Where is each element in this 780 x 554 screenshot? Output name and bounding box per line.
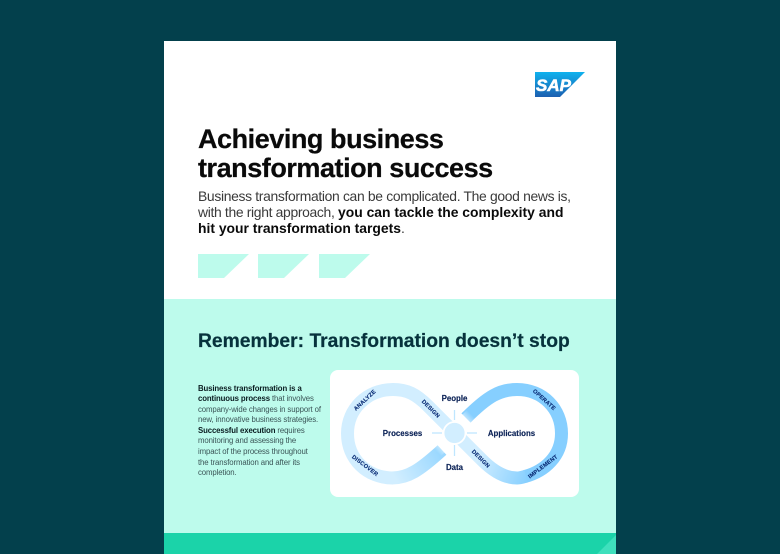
body text: monitoring and assessing the <box>198 436 296 445</box>
title: Achieving business <box>198 124 443 154</box>
panel: document page <box>164 41 616 554</box>
section heading: Remember: Transformation doesn’t stop <box>198 331 570 352</box>
diagram labels: Processes <box>383 429 423 438</box>
panel: infinity diagram card <box>330 370 579 497</box>
intro text: hit your transformation targets. <box>198 220 405 236</box>
body text <box>198 384 322 477</box>
body text: the transformation and after its <box>198 458 300 467</box>
logo: SAP: SAP <box>536 76 572 95</box>
panel: remember section <box>164 299 616 533</box>
body text: company-wide changes in support of <box>198 405 321 414</box>
loop stage labels: IMPLEMENT <box>527 454 560 480</box>
title: transformation success <box>198 153 493 183</box>
loop stage labels <box>350 388 560 480</box>
diagram labels: Data <box>446 463 464 472</box>
loop stage labels: DISCOVER <box>350 454 379 478</box>
footer band <box>164 533 616 554</box>
body text: new, innovative business strategies. <box>198 415 318 424</box>
intro text <box>198 188 571 236</box>
diagram labels: People <box>442 394 468 403</box>
center hub and spokes <box>432 410 477 456</box>
body text: completion. <box>198 468 237 477</box>
intro text: with the right approach, you can tackle the complexity and <box>198 204 563 220</box>
loop stage labels: OPERATE <box>531 388 556 412</box>
body text: Business transformation is a <box>198 384 302 392</box>
title <box>198 124 493 183</box>
infinity loop <box>348 390 562 478</box>
intro text: Business transformation can be complicated. The good news is, <box>198 188 571 204</box>
logo: SAP <box>535 72 585 97</box>
loop stage labels: DESIGN <box>420 399 440 420</box>
body text: impact of the process throughout <box>198 447 308 456</box>
body text: Successful execution requires <box>198 426 305 435</box>
diagram labels: Applications <box>488 429 536 438</box>
body text: continuous process that involves <box>198 394 314 403</box>
loop stage labels: ANALYZE <box>353 389 378 412</box>
loop stage labels: DESIGN <box>470 449 490 470</box>
decorative chevron blocks <box>198 254 370 278</box>
diagram labels <box>383 394 536 472</box>
